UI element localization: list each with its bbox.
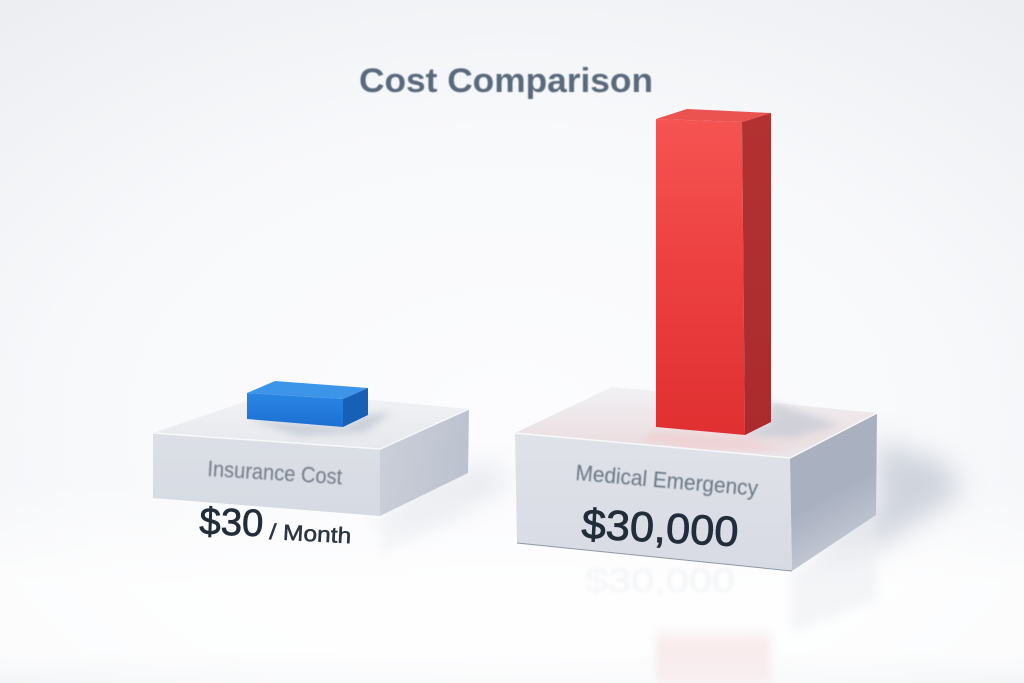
edge highlight [515, 413, 877, 458]
right platform: medical emergency [515, 109, 877, 571]
reflection: mirrored amount: $30,000 [585, 562, 735, 600]
red bar shadow [745, 402, 840, 438]
label: medical emergency: Medical Emergency [575, 460, 759, 501]
blue block shadow [247, 412, 392, 436]
label: insurance cost: Insurance Cost [207, 456, 343, 489]
amount: $30 / month [199, 501, 352, 548]
shadow: left platform [380, 465, 505, 525]
amount: $30,000: $30,000 [581, 500, 740, 555]
title: Cost Comparison [359, 62, 653, 100]
red glow on platform [640, 430, 790, 452]
platform top [515, 387, 877, 458]
reflection: right platform side [792, 520, 878, 632]
platform side [380, 409, 469, 516]
platform top [153, 391, 469, 449]
reflection: left platform side [380, 478, 468, 555]
red bar [656, 109, 771, 435]
reflection: red bar [656, 625, 771, 683]
amount: $30 / month: / Month [269, 519, 352, 548]
base line [517, 543, 792, 571]
left platform: insurance cost [153, 381, 469, 516]
edge highlight [153, 409, 469, 449]
platform side [790, 413, 877, 571]
blue block [247, 381, 368, 427]
shadow: right platform [800, 440, 960, 565]
amount: $30 / month: $30 [199, 501, 264, 545]
platform front [153, 433, 380, 516]
platform front [515, 433, 792, 571]
